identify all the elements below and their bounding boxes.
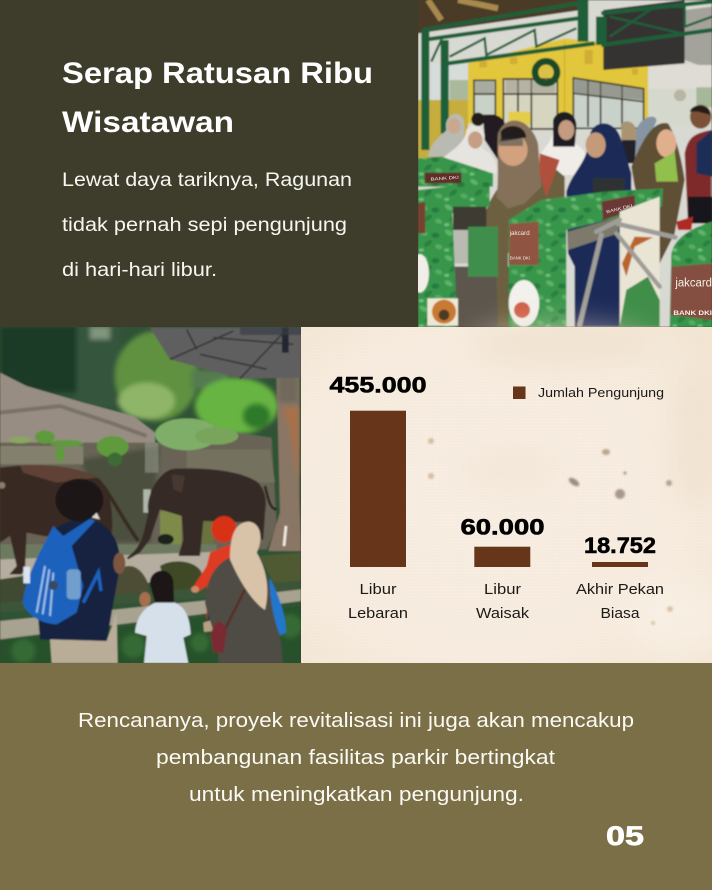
jakcard kiosk labels: BANK DKI bbox=[606, 203, 633, 214]
bar: Akhir Pekan Biasa: 18.752 bbox=[584, 533, 656, 558]
heading bbox=[62, 57, 373, 139]
intro text block: di hari-hari libur. bbox=[62, 260, 217, 281]
elephant left bbox=[0, 465, 112, 574]
page number: 05 bbox=[606, 821, 644, 851]
legend: Jumlah Pengunjung bbox=[538, 385, 664, 400]
bar: Libur Waisak: Waisak bbox=[476, 605, 530, 622]
heading: Wisatawan bbox=[62, 106, 234, 139]
jakcard kiosk labels: BANK DKI bbox=[510, 255, 530, 260]
bar: Libur Waisak: 60.000 bbox=[460, 514, 544, 540]
bar: Libur Lebaran: Lebaran bbox=[348, 605, 408, 622]
footer text block: Rencananya, proyek revitalisasi ini juga akan mencakup bbox=[78, 710, 634, 732]
jakcard kiosk labels: BANK DKI bbox=[430, 175, 459, 182]
bar: Libur Waisak bbox=[460, 514, 544, 622]
bar: Akhir Pekan Biasa bbox=[576, 533, 664, 622]
bar: Akhir Pekan Biasa: Akhir Pekan bbox=[576, 581, 664, 598]
panel: chart background bbox=[301, 323, 712, 663]
bar: Libur Waisak: Libur bbox=[484, 581, 521, 598]
elephant right bbox=[127, 468, 266, 559]
footer text block: untuk meningkatkan pengunjung. bbox=[189, 784, 524, 806]
photo: visitors watching elephants bbox=[0, 326, 302, 663]
panel: footer background bbox=[0, 663, 712, 890]
intro text block: tidak pernah sepi pengunjung bbox=[62, 215, 347, 236]
jakcard kiosk labels: BANK DKI bbox=[673, 310, 712, 317]
intro text block bbox=[62, 170, 352, 281]
intro text block: Lewat daya tariknya, Ragunan bbox=[62, 170, 352, 191]
bar chart bbox=[330, 372, 664, 622]
bar: Akhir Pekan Biasa: Biasa bbox=[600, 605, 640, 622]
blue backpack bbox=[23, 519, 95, 624]
bar: Libur Lebaran: Libur bbox=[360, 581, 396, 598]
photo: visitors at ticket turnstiles bbox=[410, 0, 712, 327]
jakcard kiosk labels: jakcard bbox=[509, 230, 530, 237]
footer text block bbox=[78, 710, 634, 806]
jakcard kiosk labels bbox=[430, 175, 712, 317]
heading: Serap Ratusan Ribu bbox=[62, 57, 373, 90]
bar: Libur Lebaran bbox=[330, 372, 426, 622]
footer text block: pembangunan fasilitas parkir bertingkat bbox=[156, 747, 556, 769]
bar: Libur Lebaran: 455.000 bbox=[330, 372, 426, 398]
panel: title background bbox=[0, 0, 418, 327]
